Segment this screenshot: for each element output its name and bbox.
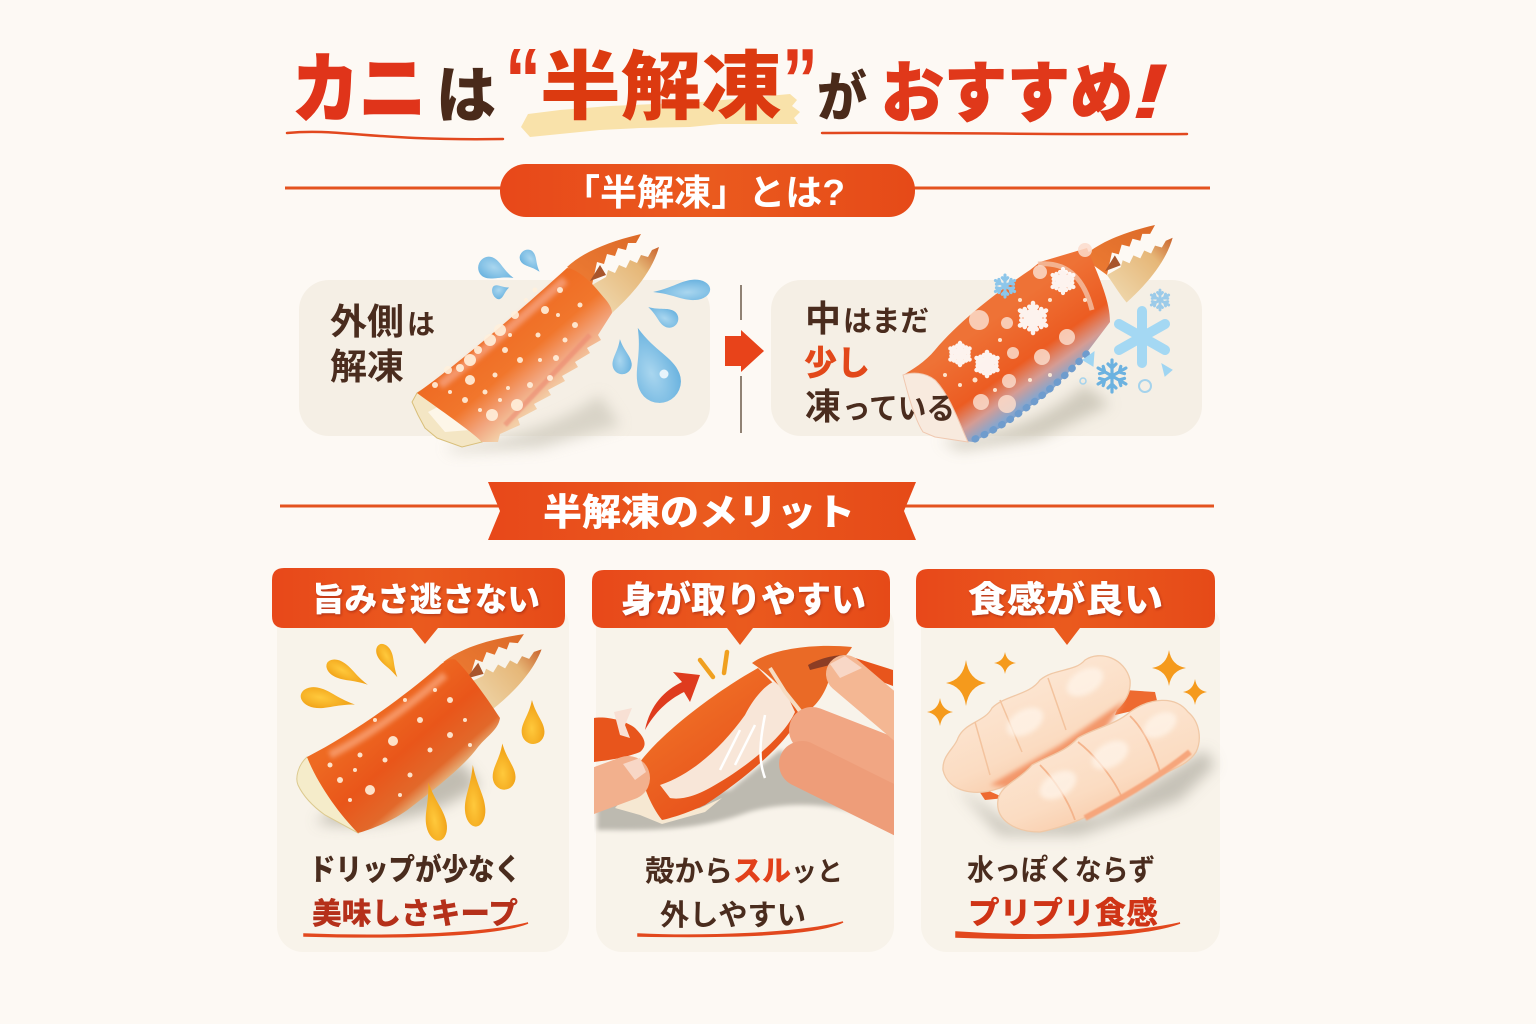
illustration: juicy crab claw [297, 627, 543, 833]
caption: 水っぽくならず [967, 854, 1155, 887]
illustration: frozen crab claw [903, 225, 1173, 450]
icon: sparkles [927, 650, 1207, 726]
icon: water drops [475, 247, 711, 409]
caption: 殻から [645, 855, 733, 888]
caption: 外しやすい [660, 899, 806, 932]
label: inside still a little frozen [804, 298, 955, 427]
card header: 身が取りやすい [621, 579, 866, 620]
caption: 美味しさキープ [312, 898, 518, 931]
label: inside still a little frozen: はまだ [843, 306, 929, 338]
section heading: what is half-thawed: 「半解凍」とは? [563, 172, 845, 213]
icon: snowflakes [995, 275, 1172, 392]
icon: lift arrow [645, 652, 727, 730]
label: outside thawed: 解凍 [330, 346, 404, 387]
section heading: what is half-thawed [285, 164, 1210, 217]
title text: おすすめ [881, 56, 1133, 130]
caption: ッと [791, 857, 843, 887]
illustration: hands pulling crab meat [582, 646, 915, 830]
panel: keeps flavour [272, 568, 569, 952]
title underlines [287, 132, 1187, 139]
section heading: merits ribbon [280, 482, 1214, 540]
title [287, 30, 1187, 139]
card header: 旨みさ逃さない [312, 581, 540, 618]
panel: inside still frozen [771, 225, 1202, 450]
panel: good texture [916, 569, 1220, 952]
section heading: merits ribbon: 半解凍のメリット [543, 492, 855, 533]
icon: golden drips [299, 641, 545, 842]
caption [956, 854, 1180, 938]
card header [272, 568, 565, 644]
label: outside thawed: 外側 [330, 301, 404, 342]
title text: “ [505, 30, 541, 129]
caption [638, 855, 843, 936]
card header [916, 569, 1215, 645]
label: outside thawed [330, 301, 435, 387]
title text: は [436, 62, 496, 131]
title text: が [817, 67, 867, 128]
label: inside still a little frozen: 凍 [805, 386, 841, 427]
illustration: thawed crab claw [412, 234, 659, 452]
label: inside still a little frozen: 少し [804, 345, 870, 383]
card header: 食感が良い [968, 579, 1163, 620]
panel: outside thawed [299, 234, 711, 452]
title text: カニ [292, 48, 426, 133]
card header [592, 570, 890, 645]
caption: プリプリ食感 [968, 896, 1158, 931]
title text: ! [1131, 47, 1169, 135]
title brush highlight [521, 94, 800, 137]
panel: easy to remove meat [582, 570, 915, 952]
illustration: crab meat rolls [943, 656, 1215, 835]
divider and arrow [725, 285, 764, 433]
label: outside thawed: は [407, 309, 435, 340]
label: inside still a little frozen: 中 [805, 298, 841, 339]
title text: ” [782, 30, 818, 129]
caption: ドリップが少なく [309, 853, 521, 887]
caption: スル [733, 856, 791, 888]
title text [292, 30, 1169, 135]
title text: 半解凍 [540, 45, 782, 129]
caption [304, 853, 528, 937]
label: inside still a little frozen: っている [842, 393, 955, 426]
